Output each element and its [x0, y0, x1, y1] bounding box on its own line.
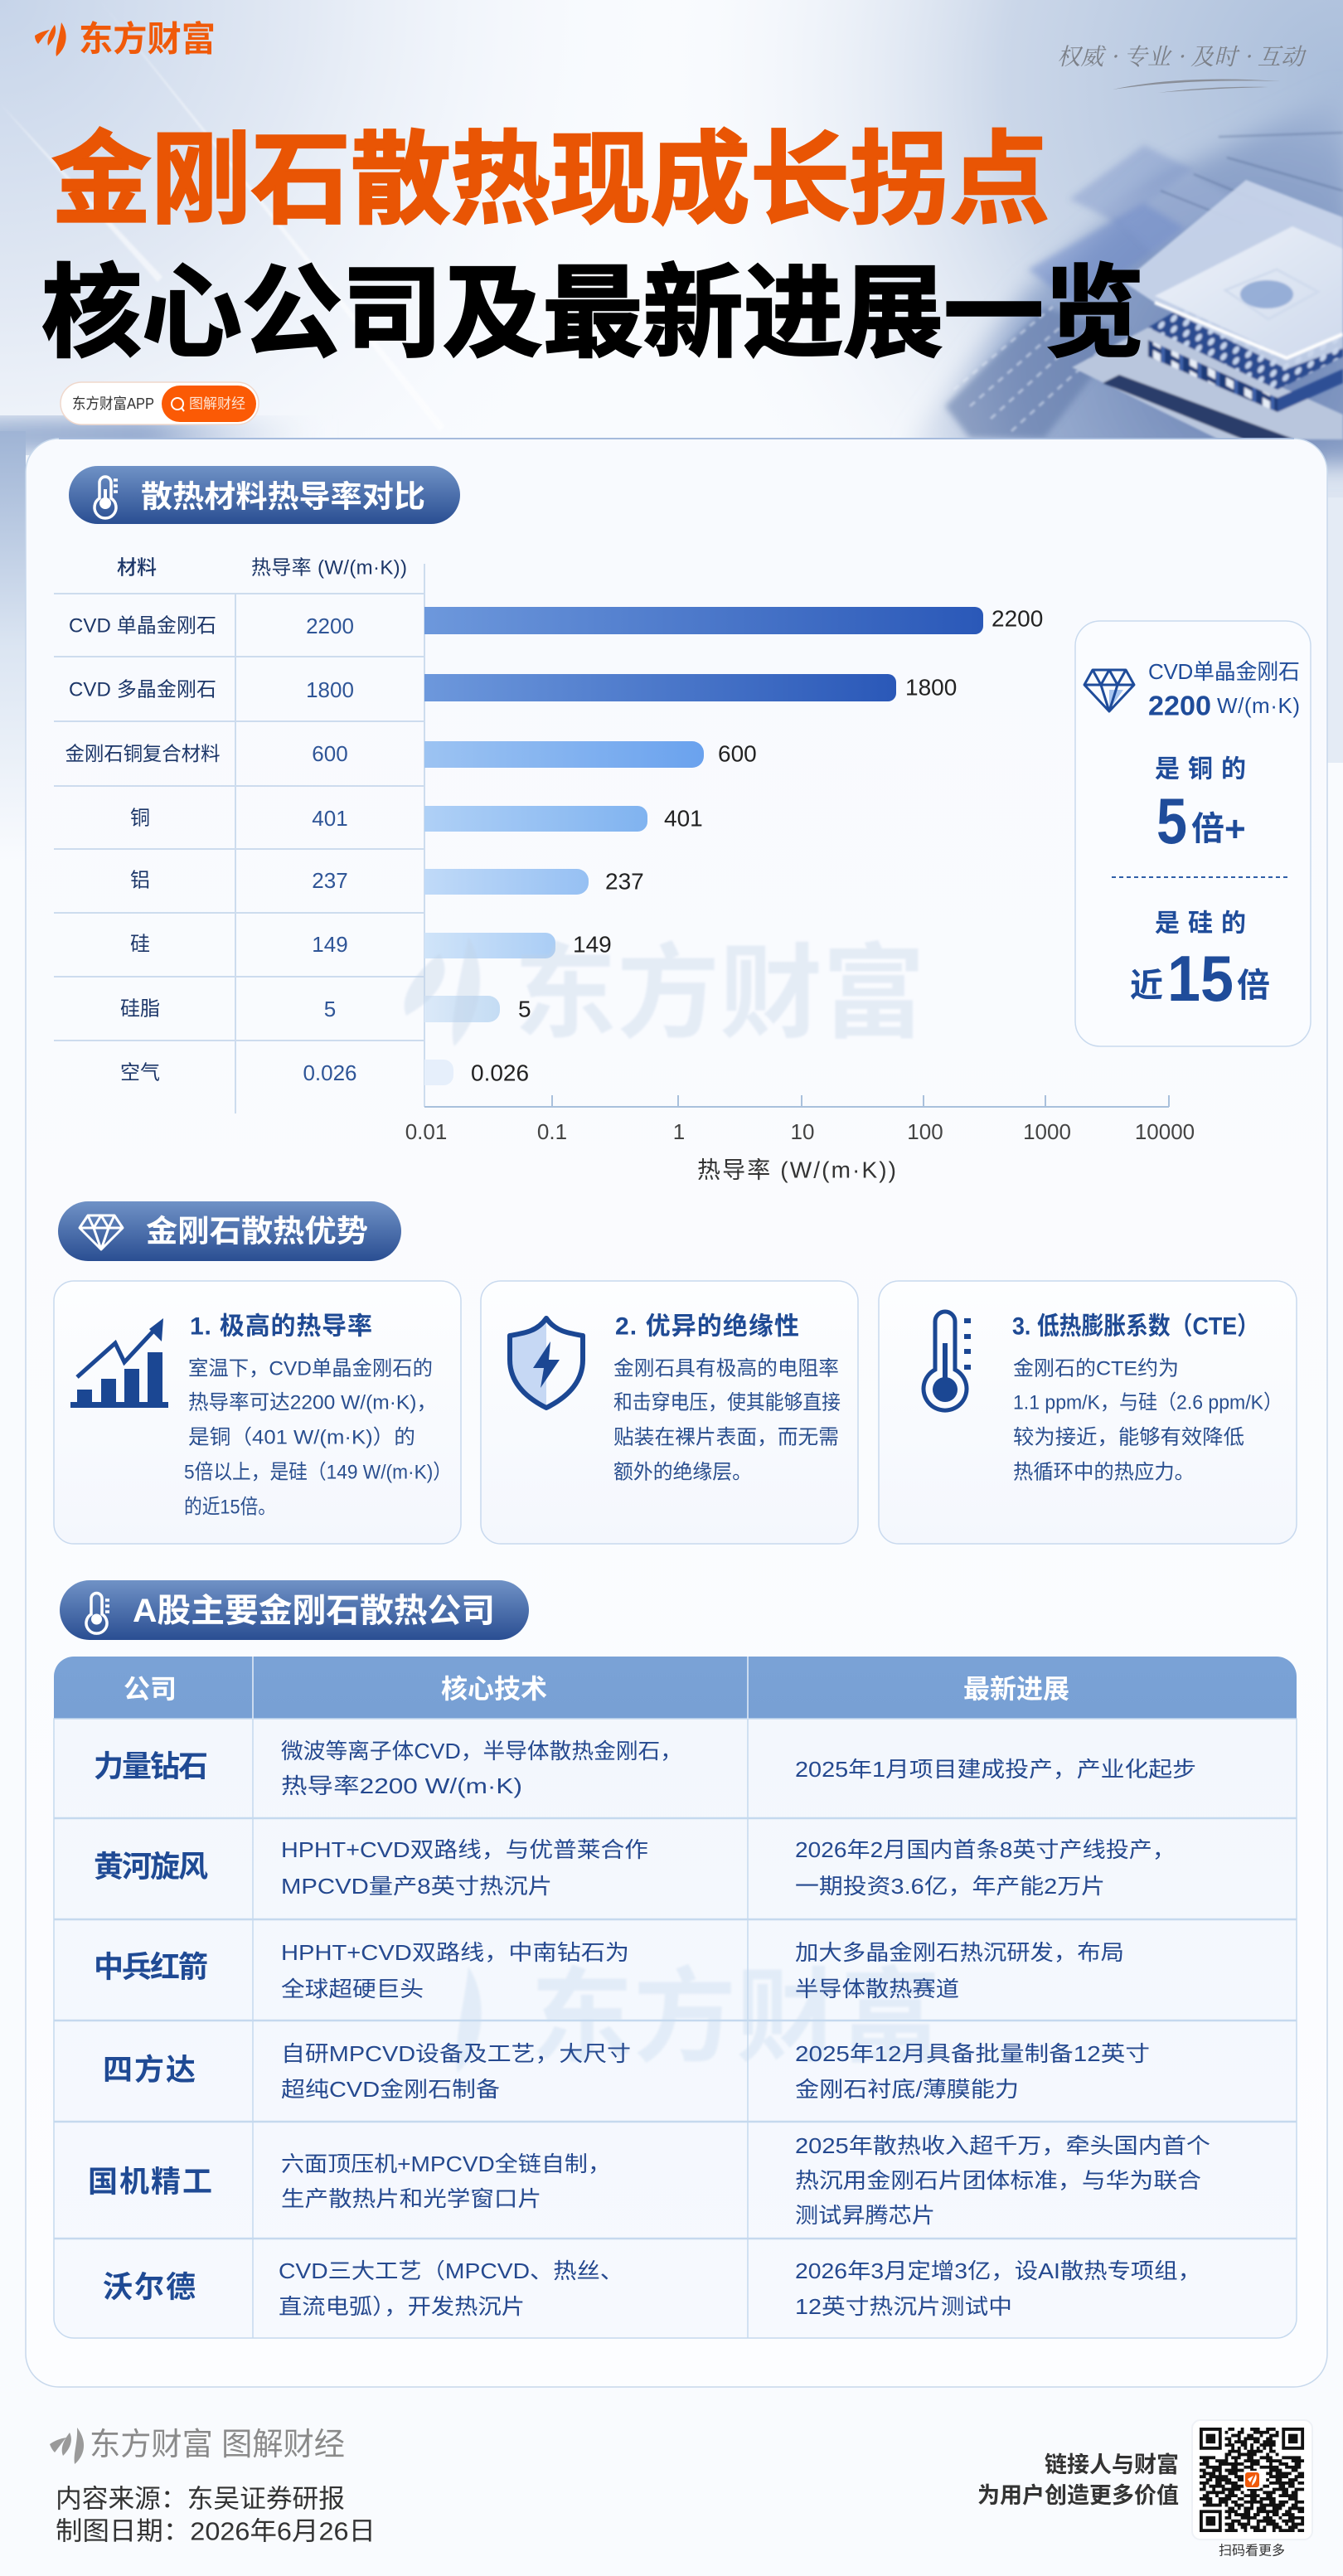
card: 低热膨胀系数: 金刚石的CTE约为 [1013, 1356, 1179, 1380]
card: 极高的热导率: 热导率可达2200 W/(m·K)， [188, 1391, 437, 1414]
company table: 热导率2200 W/(m·K) [281, 1773, 522, 1798]
company table: 超纯CVD金刚石制备 [281, 2077, 500, 2102]
bar chart: thermal conductivity (log scale): 1800 [905, 675, 957, 700]
watermark: 东方财富 [514, 937, 925, 1051]
callout: diamond vs copper and silicon [1075, 621, 1311, 1046]
QR code card [1192, 2420, 1312, 2540]
company table: 核心技术 [441, 1674, 547, 1704]
card: 极高的热导率: 1. 极高的热导率 [190, 1313, 372, 1340]
company table: 加大多晶金刚石热沉研发，布局 [795, 1940, 1124, 1965]
callout: diamond vs copper and silicon: 15 [1167, 942, 1234, 1015]
comparison table: 材料 [117, 557, 157, 579]
company table: CVD三大工艺（MPCVD、热丝、 [279, 2258, 623, 2283]
comparison table: 237 [312, 868, 348, 893]
callout: diamond vs copper and silicon: 2200 [1148, 690, 1211, 721]
company table: 四方达 [103, 2053, 196, 2086]
company table: 六面顶压机+MPCVD全链自制， [281, 2152, 611, 2176]
slogan: 链接人与财富 [977, 2452, 1179, 2508]
icon: diamond [1084, 670, 1134, 711]
callout: diamond vs copper and silicon: CVD单晶金刚石 [1148, 659, 1300, 684]
comparison table: 5 [324, 997, 336, 1021]
bar chart: thermal conductivity (log scale): 0.1 [537, 1119, 567, 1144]
logo: 东方财富: 东方财富 [79, 20, 216, 58]
callout: diamond vs copper and silicon: W/(m·K) [1217, 693, 1300, 718]
company table: 公司 [124, 1674, 177, 1704]
card: 极高的热导率: 5倍以上，是硅（149 W/(m·K)） [184, 1461, 452, 1484]
callout: diamond vs copper and silicon: 5 [1156, 784, 1187, 857]
company table: 全球超硬巨头 [281, 1977, 424, 2001]
company table: 力量钻石 [94, 1749, 208, 1783]
callout: diamond vs copper and silicon: 是硅的 [1155, 910, 1254, 937]
comparison table: 热导率 (W/(m·K)) [251, 557, 407, 579]
card: 极高的热导率: 的近15倍。 [184, 1496, 276, 1519]
comparison table: 铝 [130, 869, 150, 892]
comparison table: 149 [312, 932, 348, 957]
card: 优异的绝缘性: 2. 优异的绝缘性 [615, 1313, 799, 1340]
slogan: 链接人与财富: 为用户创造更多价值 [977, 2483, 1179, 2508]
bar chart: thermal conductivity (log scale): 401 [664, 806, 703, 831]
comparison table: 2200 [306, 614, 354, 638]
section heading: A股主要金刚石散热公司 [60, 1580, 529, 1640]
bar chart: thermal conductivity (log scale): 100 [907, 1119, 943, 1144]
icon: thermometer [924, 1312, 971, 1410]
company table: 自研MPCVD设备及工艺，大尺寸 [281, 2041, 631, 2066]
section heading: 金刚石散热优势: 金刚石散热优势 [146, 1214, 368, 1249]
callout: diamond vs copper and silicon: 倍 [1237, 968, 1270, 1004]
card: 低热膨胀系数: 3. 低热膨胀系数（CTE） [1012, 1313, 1259, 1340]
icon: shield with lightning [510, 1318, 583, 1408]
company table: 中兵红箭 [94, 1950, 208, 1983]
company table: 热沉用金刚石片团体标准，与华为联合 [795, 2168, 1201, 2193]
bar chart: thermal conductivity (log scale): 237 [605, 869, 644, 894]
card: 低热膨胀系数: 1.1 ppm/K，与硅（2.6 ppm/K） [1013, 1391, 1282, 1414]
bar chart: thermal conductivity (log scale): 2200 [991, 605, 1043, 632]
company table: 2026年3月定增3亿，设AI散热专项组， [795, 2258, 1201, 2283]
comparison table [54, 557, 424, 1113]
company table: 半导体散热赛道 [795, 1977, 959, 2001]
source and date: 制图日期：2026年6月26日 [56, 2517, 376, 2545]
title line 2: 核心公司及最新进展一览 [41, 257, 1144, 370]
comparison table: 硅 [130, 934, 150, 955]
card: 极高的热导率: 是铜（401 W/(m·K)）的 [188, 1426, 415, 1449]
bar chart: thermal conductivity (log scale): 600 [718, 741, 757, 766]
icon: rising chart [70, 1318, 168, 1408]
footer brand: 东方财富 图解财经 [90, 2428, 345, 2462]
company table: 黄河旋风 [94, 1849, 208, 1884]
slogan: 链接人与财富: 链接人与财富 [1045, 2452, 1179, 2477]
bar chart: thermal conductivity (log scale): 热导率 (W/(m·K)) [697, 1157, 896, 1182]
comparison table: 0.026 [303, 1060, 357, 1085]
company table: HPHT+CVD双路线，与优普莱合作 [281, 1837, 648, 1862]
company table: 12英寸热沉片测试中 [795, 2294, 1012, 2319]
company table: 生产散热片和光学窗口片 [281, 2186, 541, 2211]
company table [54, 1657, 1297, 2338]
company table: 一期投资3.6亿，年产能2万片 [795, 1874, 1105, 1899]
callout: diamond vs copper and silicon: 近 [1130, 968, 1163, 1004]
callout: diamond vs copper and silicon: 是铜的 [1155, 756, 1254, 783]
company table: MPCVD量产8英寸热沉片 [281, 1874, 552, 1899]
source and date [56, 2484, 376, 2545]
section heading: 散热材料热导率对比 [69, 466, 460, 524]
comparison table: 600 [312, 741, 348, 766]
QR caption: 扫码看更多 [1219, 2544, 1285, 2559]
card: 优异的绝缘性: 金刚石具有极高的电阻率 [613, 1356, 839, 1380]
bar chart: thermal conductivity (log scale): 10 [791, 1119, 814, 1144]
bar chart: thermal conductivity (log scale): 0.01 [405, 1119, 447, 1144]
section heading: 散热材料热导率对比: 散热材料热导率对比 [141, 479, 425, 514]
slogan [1057, 39, 1307, 93]
main panel [26, 439, 1327, 2387]
company table: HPHT+CVD双路线，中南钻石为 [281, 1940, 629, 1965]
comparison table: 硅脂 [120, 998, 160, 1020]
card: 优异的绝缘性: 额外的绝缘层。 [613, 1461, 752, 1484]
card: 优异的绝缘性: 贴装在裸片表面，而无需 [613, 1426, 839, 1449]
card: 极高的热导率 [54, 1281, 461, 1544]
bar chart: thermal conductivity (log scale): 10000 [1135, 1119, 1195, 1144]
company table: 2026年2月国内首条8英寸产线投产， [795, 1837, 1176, 1862]
bar chart: thermal conductivity (log scale): 1000 [1023, 1119, 1071, 1144]
callout: diamond vs copper and silicon: + [1224, 809, 1246, 849]
source and date: 内容来源：东吴证券研报 [56, 2484, 345, 2514]
comparison table: 1800 [306, 677, 354, 702]
comparison table: 401 [312, 806, 348, 831]
card: 优异的绝缘性: 和击穿电压，使其能够直接 [613, 1391, 841, 1414]
comparison table: 铜 [130, 808, 150, 829]
table watermark: 东方财富 [531, 1961, 942, 2075]
comparison table: CVD 单晶金刚石 [69, 615, 216, 637]
comparison table: 金刚石铜复合材料 [65, 743, 221, 764]
tag pill: 图解财经 [189, 396, 245, 411]
card: 极高的热导率: 室温下，CVD单晶金刚石的 [188, 1356, 433, 1380]
company table: 沃尔德 [103, 2270, 196, 2303]
comparison table: CVD 多晶金刚石 [69, 678, 216, 701]
card: 低热膨胀系数: 较为接近，能够有效降低 [1013, 1426, 1244, 1449]
tag pill: 东方财富APP [72, 395, 154, 412]
bar chart: thermal conductivity (log scale) [405, 605, 1195, 1182]
company table: 微波等离子体CVD，半导体散热金刚石， [281, 1739, 682, 1763]
company table: 最新进展 [963, 1674, 1069, 1704]
company table: 2025年散热收入超千万，牵头国内首个 [795, 2133, 1210, 2158]
card: 低热膨胀系数 [879, 1281, 1297, 1544]
slogan: 权威 · 专业 · 及时 · 互动 [1057, 39, 1307, 72]
card: 低热膨胀系数: 热循环中的热应力。 [1013, 1461, 1195, 1484]
bar chart: thermal conductivity (log scale): 0.026 [471, 1060, 529, 1086]
bar chart: thermal conductivity (log scale): 5 [518, 997, 531, 1021]
section heading: A股主要金刚石散热公司: A股主要金刚石散热公司 [133, 1593, 495, 1629]
bar chart: thermal conductivity (log scale): 149 [573, 932, 612, 957]
tag pill [61, 382, 259, 424]
title line 1: 金刚石散热现成长拐点 [51, 124, 1050, 236]
bar chart: thermal conductivity (log scale): 1 [673, 1119, 685, 1144]
company table: 测试昇腾芯片 [795, 2203, 935, 2228]
callout: diamond vs copper and silicon: 倍 [1191, 811, 1224, 847]
header background illustration [0, 0, 1343, 862]
company table: 直流电弧），开发热沉片 [279, 2294, 525, 2319]
company table: 2025年1月项目建成投产，产业化起步 [795, 1757, 1196, 1782]
company table: 金刚石衬底/薄膜能力 [795, 2077, 1019, 2102]
card: 优异的绝缘性 [481, 1281, 858, 1544]
company table: 2025年12月具备批量制备12英寸 [795, 2041, 1150, 2066]
section heading: 金刚石散热优势 [58, 1201, 401, 1261]
company table: 国机精工 [88, 2164, 212, 2199]
comparison table: 空气 [120, 1061, 160, 1084]
